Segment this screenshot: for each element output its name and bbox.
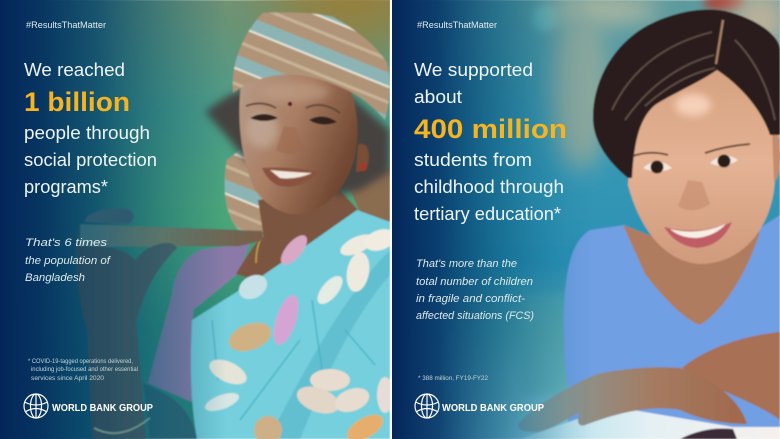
footnote: * COVID-19-tagged operations delivered, <box>28 359 133 365</box>
footnote: services since April 2020 <box>31 376 105 382</box>
headline continuation: social protection <box>24 150 157 170</box>
hand gripping hoe handle <box>76 208 264 439</box>
comparison note: the population of <box>25 255 111 267</box>
logo: World Bank Group: WORLD BANK GROUP <box>442 402 544 414</box>
headline: we supported about: We supported <box>414 60 533 80</box>
headline continuation: people through <box>24 123 150 143</box>
headline continuation <box>24 123 157 197</box>
hashtag: #ResultsThatMatter <box>26 20 106 30</box>
photo: smiling girl with book <box>392 0 780 439</box>
headline: we supported about: about <box>414 87 462 107</box>
photo: woman <box>46 0 390 439</box>
key figure: 1 billion: 1 billion <box>24 87 130 117</box>
comparison note: That's more than the <box>416 258 517 270</box>
headline: we supported about <box>414 60 533 107</box>
headline continuation: tertiary education* <box>414 204 561 224</box>
navy gradient overlay <box>392 0 584 439</box>
comparison note: total number of children <box>416 276 533 288</box>
headline continuation: programs* <box>24 177 108 197</box>
panel: right, education <box>392 0 780 439</box>
logo: World Bank Group <box>24 394 153 418</box>
comparison note <box>416 258 534 322</box>
headline continuation <box>414 150 564 224</box>
headline: we reached: We reached <box>24 60 125 80</box>
comparison note: Bangladesh <box>25 272 85 284</box>
logo: World Bank Group: WORLD BANK GROUP <box>52 402 153 414</box>
footnote <box>28 359 138 382</box>
logo: World Bank Group <box>415 394 544 418</box>
comparison note: in fragile and conflict- <box>416 293 525 305</box>
headline continuation: students from <box>414 150 532 170</box>
footnote: including job-focused and other essential <box>31 367 138 373</box>
panel: left, social protection <box>0 0 430 439</box>
comparison note <box>25 237 111 284</box>
key figure: 400 million: 400 million <box>414 114 567 144</box>
navy gradient overlay <box>0 0 220 439</box>
footnote: * 388 million, FY19-FY22 <box>418 376 489 382</box>
hashtag: #ResultsThatMatter <box>417 20 497 30</box>
comparison note: affected situations (FCS) <box>416 310 534 322</box>
comparison note: That's 6 times <box>25 237 108 249</box>
headline continuation: childhood through <box>414 177 564 197</box>
